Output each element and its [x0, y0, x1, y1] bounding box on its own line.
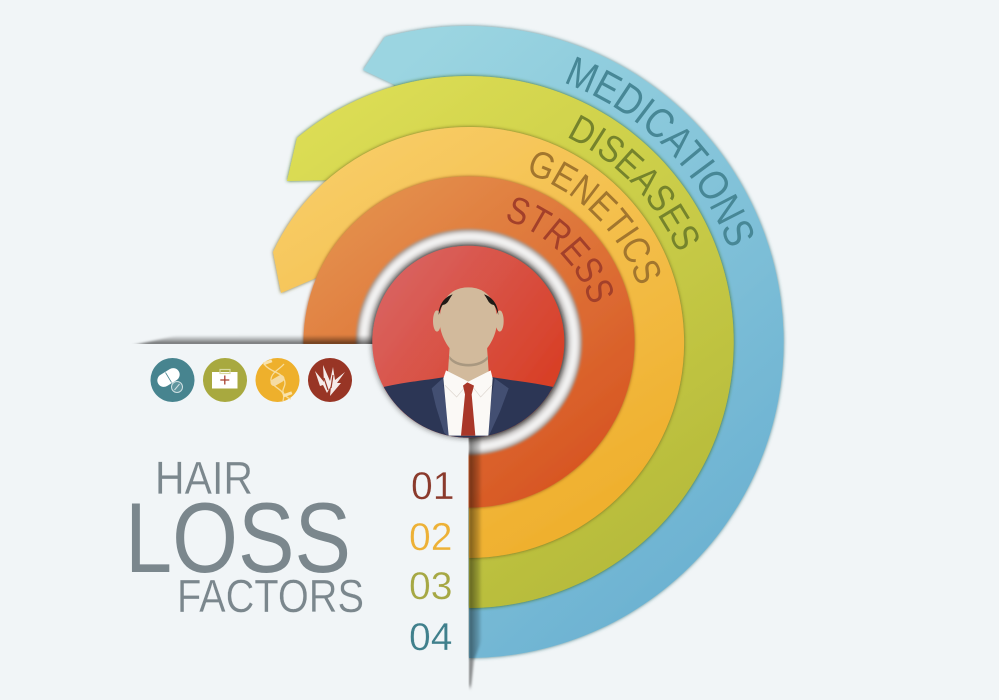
tie	[461, 382, 475, 436]
title: factors: FACTORS	[177, 570, 364, 622]
portrait	[372, 246, 564, 445]
number 03: 03	[409, 565, 452, 608]
suit	[384, 377, 553, 438]
hair	[439, 294, 498, 315]
ring: genetics	[270, 124, 686, 560]
ring: stress	[301, 174, 636, 510]
number 02: 02	[409, 516, 452, 559]
ears	[433, 310, 441, 332]
panel	[125, 344, 468, 700]
shirt	[443, 370, 493, 436]
man figure	[384, 287, 553, 438]
title: hair: HAIR	[155, 452, 253, 504]
icon: first aid kit	[203, 358, 247, 402]
label: medications: MEDICATIONS	[566, 56, 754, 246]
neck	[448, 348, 489, 382]
icon: stress lightning	[308, 358, 352, 402]
number 01: 01	[411, 465, 454, 508]
icon: dna	[256, 358, 300, 402]
label: diseases: DISEASES	[568, 114, 699, 250]
label: stress: STRESS	[508, 198, 613, 302]
label: genetics: GENETICS	[530, 152, 660, 284]
white ring around portrait	[356, 229, 582, 455]
title: loss: LOSS	[125, 482, 351, 593]
number 04: 04	[409, 616, 452, 659]
head	[440, 287, 496, 348]
panel shadows	[134, 335, 482, 687]
icon: medication pill	[150, 358, 194, 402]
